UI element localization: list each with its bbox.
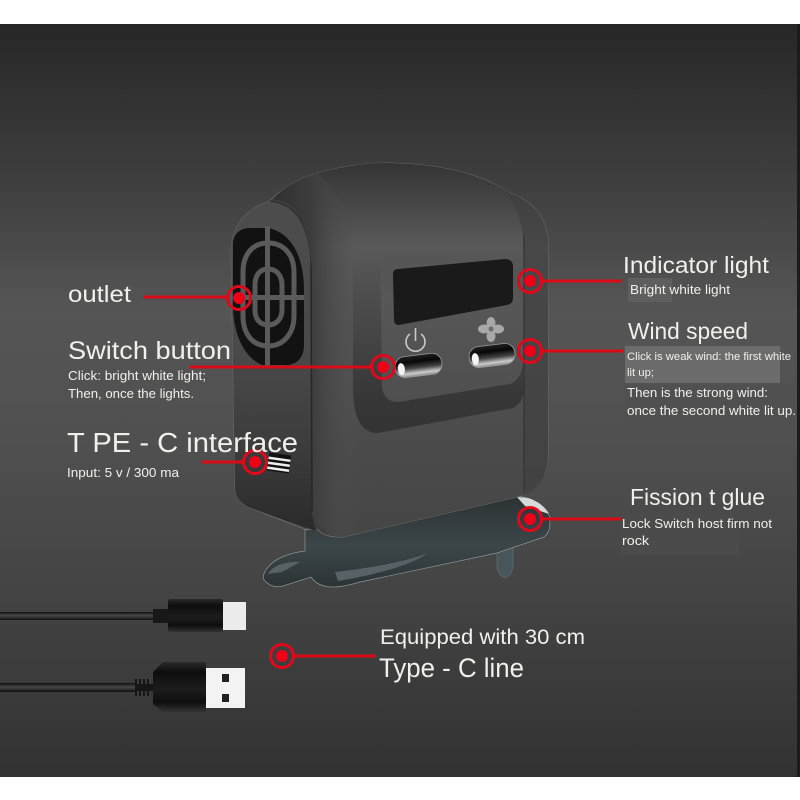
- callout: outlet: [68, 281, 250, 310]
- callout: wind speed: Click is weak wind: the first white: [627, 351, 791, 363]
- callout: wind speed: lit up;: [627, 367, 654, 379]
- callout: indicator light: Indicator light: [623, 252, 770, 278]
- callout: switch button: Switch button: [68, 337, 231, 365]
- pin: [497, 545, 513, 578]
- callout: type-c interface: Input: 5 v / 300 ma: [67, 466, 179, 480]
- outer body silhouette: [231, 163, 548, 537]
- side bevel shading: [272, 173, 360, 537]
- icon: fan symbol: [478, 317, 504, 342]
- callout: fission glue: rock: [622, 533, 650, 548]
- USB-C port: [267, 453, 291, 473]
- USB-A cable: [0, 662, 245, 712]
- control recess: [353, 250, 524, 433]
- callout: cable: [270, 626, 585, 683]
- callout: switch button: Then, once the lights.: [68, 387, 194, 401]
- callout: fission glue: Lock Switch host firm not: [622, 516, 772, 531]
- outlet grille: [233, 226, 304, 366]
- callout: outlet: outlet: [68, 281, 132, 307]
- callout: wind speed: Wind speed: [628, 318, 748, 344]
- side face: [231, 201, 316, 531]
- callout: indicator light: [518, 252, 770, 297]
- text backing patches: [621, 278, 797, 555]
- callout: cable: Type - C line: [379, 653, 524, 683]
- callout: wind speed: Then is the strong wind:: [627, 385, 768, 400]
- callout: fission glue: Fission t glue: [630, 484, 765, 510]
- device: fan unit: [231, 163, 550, 587]
- callout: wind speed: once the second white lit up.: [627, 403, 796, 418]
- power button: [394, 352, 443, 379]
- callout: type-c interface: T PE - C interface: [67, 427, 298, 458]
- callout: switch button: [68, 337, 394, 401]
- callout: wind speed: [518, 318, 796, 418]
- callout: type-c interface: [67, 427, 298, 480]
- icon: power symbol: [406, 328, 425, 351]
- base clip and stand: [263, 496, 550, 587]
- callout: fission glue: [518, 484, 772, 548]
- callout: indicator light: Bright white light: [630, 283, 731, 297]
- Type-C cable: [0, 599, 246, 632]
- callout: switch button: Click: bright white light;: [68, 369, 206, 383]
- callout: cable: Equipped with 30 cm: [380, 626, 585, 649]
- front face: [272, 163, 548, 537]
- display window: [393, 259, 513, 325]
- wind button: [468, 342, 516, 369]
- right edge: [502, 188, 548, 495]
